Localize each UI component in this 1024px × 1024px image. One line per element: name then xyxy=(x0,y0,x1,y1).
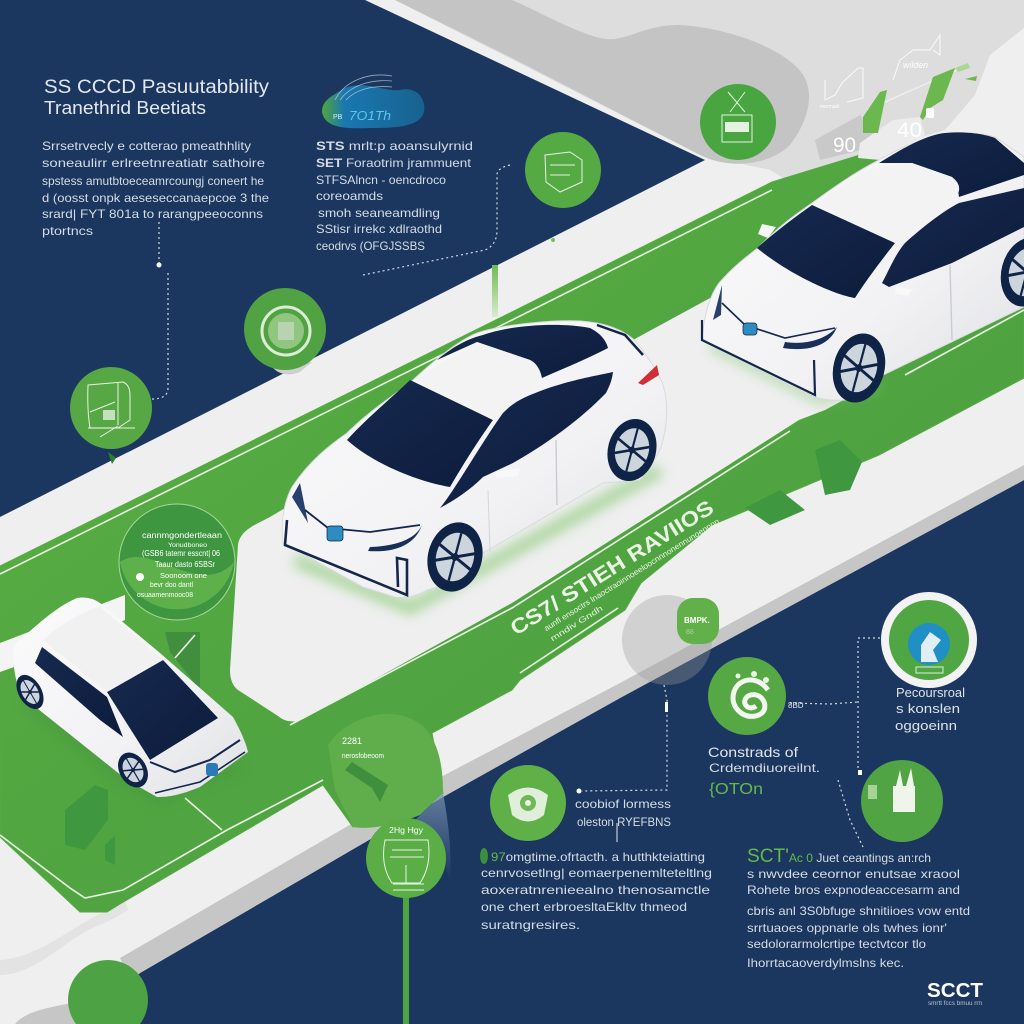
label: person circle: s konslen xyxy=(896,701,960,716)
connector lines upper xyxy=(152,165,510,399)
text block: bottom centre: aoxeratnrenieealno thenosamctle xyxy=(481,883,710,897)
icon circle: person ring xyxy=(881,592,977,688)
car: middle xyxy=(282,321,667,608)
text: green band title xyxy=(506,496,729,658)
badge: cloud label: PB xyxy=(333,114,343,121)
chart area top right: green tabs and values: mermaid xyxy=(820,104,840,110)
text block: intro: ptortncs xyxy=(42,224,93,238)
text block: middle column: smoh seaneamdling xyxy=(318,206,440,220)
text block: middle column: ceodrvs (OFGJSSBS xyxy=(316,239,425,253)
icon circle: swirl xyxy=(708,657,786,735)
central white road xyxy=(230,260,875,722)
rear glass xyxy=(107,660,218,760)
white strip behind left car xyxy=(0,595,125,672)
mirror and door seams xyxy=(495,468,520,478)
icon circle: factory top xyxy=(700,84,776,160)
text block: bottom centre xyxy=(480,848,712,932)
roof glass xyxy=(437,325,608,378)
white route lines xyxy=(0,190,1024,898)
bottom left shaded ground xyxy=(0,900,128,1024)
icon pill: savings with gray disc xyxy=(622,595,719,685)
text: green band title: mndiv Gndh xyxy=(549,604,604,643)
car: lower left xyxy=(11,598,248,800)
text block: bottom right: cbris anl 3S0bfuge shnitiioes vow entd xyxy=(747,904,970,918)
label: person circle xyxy=(895,685,965,733)
text block: bottom right: Rohete bros expnodeaccesarm and xyxy=(747,883,960,897)
grey blob at top xyxy=(395,0,809,164)
icon circle: charger on stem: 2Hg Hgy xyxy=(389,826,423,835)
heading: SS CCCD Pasuutabbility xyxy=(44,77,270,98)
icon circle: building xyxy=(861,760,943,842)
green blocks icon lower right xyxy=(745,440,862,525)
green vertical marker xyxy=(492,265,498,317)
wheels xyxy=(825,327,893,409)
windshield xyxy=(347,380,493,487)
lens callout with text xyxy=(119,504,235,620)
headlights xyxy=(713,285,722,320)
front detail lines xyxy=(150,740,240,772)
side window xyxy=(440,372,613,508)
wheels xyxy=(420,516,490,598)
label: eye circle: oleston RYEFBNS xyxy=(577,815,671,829)
translucent green bubble xyxy=(328,714,451,880)
tail light xyxy=(638,365,659,385)
side window xyxy=(35,647,123,737)
roof panel xyxy=(814,163,959,243)
badge: cloud label: 7O1Th xyxy=(349,108,391,123)
text block: intro xyxy=(42,139,269,238)
text block: middle column xyxy=(316,139,473,253)
text block: bottom centre: 97omgtime.ofrtacth. a hutthkteiatting xyxy=(491,850,705,864)
badge xyxy=(743,323,757,335)
badge xyxy=(327,526,343,541)
car: top right xyxy=(702,132,1024,409)
lens callout with text: cannmgondertleaan xyxy=(142,531,222,540)
chart area top right: green tabs and values xyxy=(815,35,977,160)
lens callout with text: bevr doo dantl xyxy=(150,582,193,589)
text block: bottom right: SCT'Ac 0 Juet ceantings an:rch xyxy=(747,846,931,867)
text block: intro: d (oosst onpk aeseseccanaepcoe 3 the xyxy=(42,191,269,205)
chart area top right: green tabs and values: wilden xyxy=(903,60,928,70)
icon circle: eye mask xyxy=(490,765,566,841)
translucent green bubble: nerosfobeoom xyxy=(342,753,384,760)
label: swirl circle: Crdemdiuoreilnt. xyxy=(709,761,820,775)
lens callout with text: (GSB6 tatemr esscnt| 06 xyxy=(142,549,220,558)
text: green band title: aunfl ensoctrs lnaoctraoinnoeeloocnnnonennunoennnn xyxy=(542,517,721,633)
label: swirl circle: Constrads of xyxy=(708,744,798,760)
front bumper lines xyxy=(702,320,815,395)
translucent green bubble: 2281 xyxy=(342,736,362,746)
small circle bottom left xyxy=(68,960,148,1024)
text block: bottom right: srrtuaoes oppnarle ols twhes ionr' xyxy=(747,921,947,935)
icon circle: gauge on pedestal xyxy=(244,288,326,374)
chart area top right: green tabs and values: 90 xyxy=(833,134,856,157)
logo: smrtt fccs bmuu rrn xyxy=(928,1001,982,1007)
text block: intro: Srrsetrvecly e cotterao pmeathhlity xyxy=(42,139,251,153)
heading: Tranethrid Beetiats xyxy=(44,98,206,118)
dark green shadows beside lens xyxy=(165,632,200,690)
text block: bottom centre: one chert erbroesltaEkltv thmeod xyxy=(481,900,687,914)
text block: middle column: STS mrlt:p aoansulyrnid xyxy=(316,139,473,153)
roof glass xyxy=(879,132,1024,197)
text block: middle column: coreoamds xyxy=(316,189,383,203)
grey edge under lower band xyxy=(120,465,1024,980)
text block: middle column: SET Foraotrim jrammuent xyxy=(316,156,472,170)
label: marker near swirl: 8BD xyxy=(788,701,804,710)
lens callout with text: Taaur dasto 6SBSr xyxy=(155,560,215,569)
label: eye circle: coobiof lormess xyxy=(575,797,671,811)
front bumper lines xyxy=(285,520,407,595)
text block: bottom centre: cenrvosetlng| eomaerpenemlteteltlng xyxy=(481,866,712,880)
text block: bottom right xyxy=(747,846,970,970)
lens callout with text: Yonudboneo xyxy=(168,543,208,549)
roof panel xyxy=(413,342,539,420)
connector lines lower xyxy=(576,638,880,847)
text block: intro: spstess amutbtoeceamrcoungj coneert he xyxy=(42,174,264,188)
text block: middle column: STFSAlncn - oencdroco xyxy=(316,173,446,187)
icon pill: savings with gray disc: BMPK. xyxy=(684,616,710,625)
text block: bottom right: sedolorarmolcrtipe tectvtcor tlo xyxy=(747,937,926,951)
roof panel xyxy=(43,607,163,692)
text block: middle column: SStisr irrekc xdlraothd xyxy=(316,222,442,236)
heading xyxy=(44,77,270,118)
label: person circle: Pecoursroal xyxy=(896,685,965,700)
lens callout with text: Soonoom one xyxy=(160,573,207,580)
icon circle: charger on stem xyxy=(366,818,446,1024)
label: swirl circle xyxy=(708,744,820,798)
icon pill: savings with gray disc: 88 xyxy=(686,629,694,636)
text block: intro: soneaulirr erlreetnreatiatr sathoire xyxy=(42,156,265,170)
green route band xyxy=(0,155,1024,912)
lens callout with text: osuaamenmooc08 xyxy=(137,592,193,599)
chart area top right: green tabs and values: 40 xyxy=(897,119,922,142)
windshield xyxy=(757,205,895,298)
wheels xyxy=(112,747,154,793)
top grey area xyxy=(395,0,1024,182)
side window xyxy=(882,188,1024,287)
label: person circle: oggoeinn xyxy=(895,718,957,733)
green blocks icon lower left xyxy=(65,785,115,865)
text block: bottom right: Ihorrtacaoverdylmslns kec. xyxy=(747,956,904,970)
badge: cloud label xyxy=(322,75,424,128)
text block: bottom centre: suratngresires. xyxy=(481,918,580,932)
badge xyxy=(206,763,218,776)
label: eye circle xyxy=(575,797,671,829)
icon circle: lab cup top xyxy=(525,132,601,242)
text block: bottom right: s nwvdee ceornor enutsae xraool xyxy=(747,867,960,881)
icon circle: document xyxy=(70,367,152,464)
text block: intro: srard| FYT 801a to rarangpeeoconns xyxy=(42,207,263,221)
headlights xyxy=(292,483,308,523)
text: green band title: CS7/ STIEH RAVIIOS xyxy=(506,496,718,640)
logo: SCCT xyxy=(927,980,983,1002)
label: swirl circle: {OTOn xyxy=(709,781,763,798)
